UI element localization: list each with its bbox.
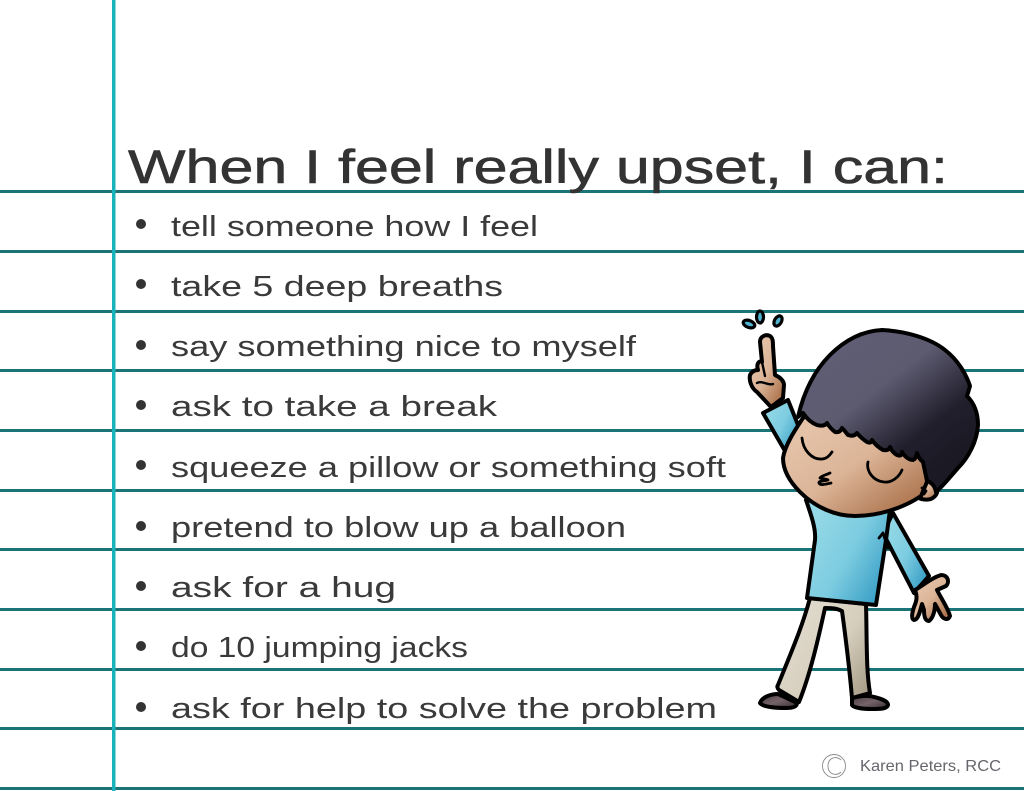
item: say something nice: say something nice to myself <box>171 331 637 363</box>
face details <box>802 438 926 548</box>
item: take a break: ask to take a break <box>171 391 498 423</box>
item: jumping jacks: do 10 jumping jacks <box>171 632 468 664</box>
illustration: boy pointing up <box>742 311 978 709</box>
copyright symbol <box>822 754 846 778</box>
raised arm <box>763 400 800 451</box>
item: deep breaths: take 5 deep breaths <box>171 271 503 303</box>
hair <box>798 330 978 492</box>
trousers <box>777 598 870 702</box>
icon: thought drops <box>742 311 784 329</box>
credit: Karen Peters, RCC <box>860 758 1001 775</box>
item: tell someone: tell someone how I feel <box>171 211 538 243</box>
item: squeeze a pillow: squeeze a pillow or something soft <box>171 452 726 484</box>
item: ask for a hug <box>136 572 396 604</box>
torso <box>806 500 890 605</box>
margin line <box>112 0 116 791</box>
title: When I feel really upset, I can: <box>128 140 948 193</box>
item: ask for a hug: ask for a hug <box>171 572 396 604</box>
item: balloon: pretend to blow up a balloon <box>171 512 626 544</box>
coping strategies list <box>136 211 726 725</box>
item: deep breaths <box>136 271 503 303</box>
left arm <box>883 513 929 593</box>
raised hand <box>750 335 784 407</box>
face <box>783 405 932 516</box>
ruled notebook lines <box>0 190 1024 790</box>
item: take a break <box>136 391 498 423</box>
shoes <box>760 694 888 709</box>
hand fold detail <box>757 362 773 384</box>
item: ask for help: ask for help to solve the problem <box>171 693 717 725</box>
open hand <box>912 575 950 621</box>
ear <box>917 480 938 500</box>
